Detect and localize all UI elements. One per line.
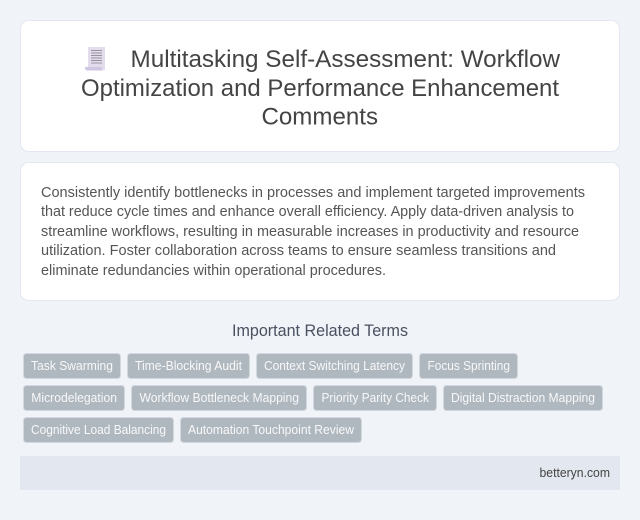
tag [132,386,306,410]
tag: Focus Sprinting [428,358,510,373]
tag: Task Swarming [31,358,113,373]
tag [314,386,436,410]
footer source text: betteryn.com [540,466,610,480]
tag: Time-Blocking Audit [135,358,242,373]
tag [444,386,602,410]
tag: Microdelegation [31,390,117,405]
tag: Priority Parity Check [322,390,430,405]
description text: that reduce cycle times and enhance overall efficiency. Apply data-driven analysis to [41,204,574,220]
title: Multitasking Self-Assessment: Workflow [130,46,560,73]
tag: Digital Distraction Mapping [451,390,595,405]
panel: description card [20,162,620,300]
title: Optimization and Performance Enhancement [81,75,559,102]
tag [420,354,518,378]
icon: document scroll [85,47,105,70]
footer bar [20,456,620,490]
description text: streamline workflows, resulting in measurable increases in productivity and resource [41,224,579,240]
title [81,46,560,130]
tag list [24,354,602,442]
tag [128,354,250,378]
description text [41,185,585,279]
tag: Workflow Bottleneck Mapping [140,390,299,405]
tag [180,418,362,442]
tag [24,354,120,378]
title: Comments [262,104,378,130]
tag [256,354,412,378]
description text: Consistently identify bottlenecks in processes and implement targeted improvements [41,185,585,201]
tag: Cognitive Load Balancing [31,422,166,437]
tag [24,386,124,410]
description text: utilization. Foster collaboration across teams to ensure seamless transitions and [41,243,556,259]
tag [24,418,174,442]
description text: eliminate redundancies within operational procedures. [41,263,386,279]
heading: related terms: Important Related Terms [232,322,408,340]
tag: Automation Touchpoint Review [188,422,355,437]
tag: Context Switching Latency [264,358,406,373]
panel: title card [20,20,620,152]
